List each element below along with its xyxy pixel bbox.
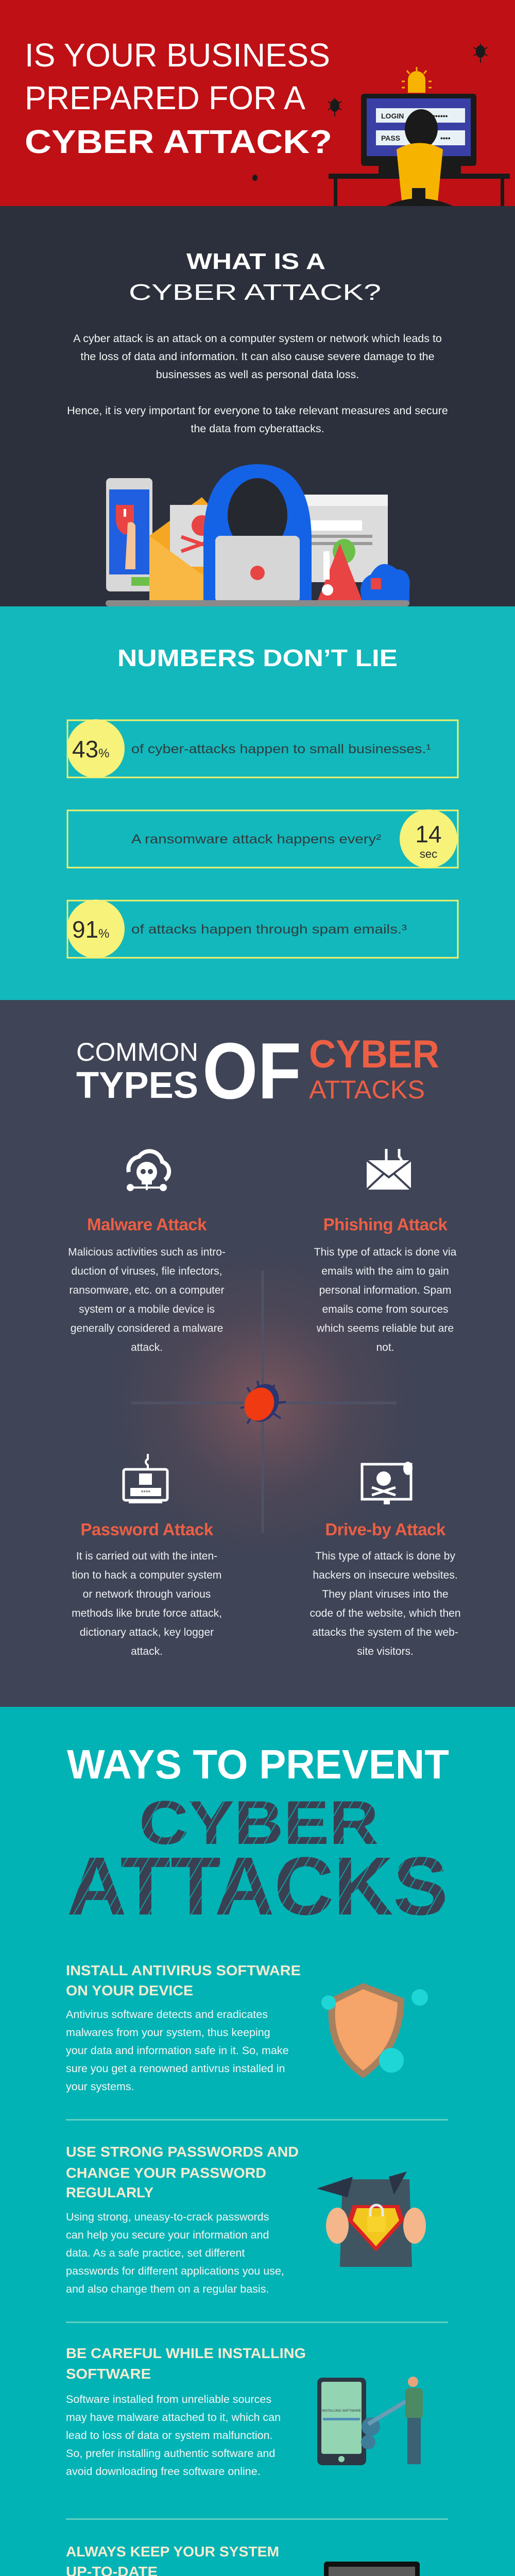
stat: 91% spam emails: of attacks happen through spam emails.³: [131, 922, 407, 937]
text: It is carried out with the inten-: [76, 1550, 217, 1562]
heading: USE STRONG PASSWORDS AND: [66, 2144, 299, 2160]
text: [66, 2393, 281, 2478]
text: Using strong, uneasy-to-crack passwords: [66, 2211, 269, 2223]
card: password attack: [72, 1520, 222, 1657]
title: CYBER ATTACK?: [25, 123, 332, 160]
text: emails with the aim to gain: [321, 1265, 449, 1277]
illustration: hacker at computer: ••••: [440, 134, 451, 142]
stat: ransomware every 14 sec: A ransomware attack happens every²: [131, 832, 381, 846]
heading: common types of cyber attacks: COMMON: [76, 1038, 198, 1066]
divider: [66, 2119, 448, 2121]
crosshair lines: [131, 1270, 397, 1533]
section: ways to prevent heading: WAYS TO PREVENT: [67, 1741, 449, 1787]
stat: 91% spam emails: 91%: [72, 916, 110, 943]
text: which seems reliable but are: [317, 1323, 454, 1334]
title: [25, 37, 332, 160]
text: passwords for different applications you use,: [66, 2265, 284, 2277]
tip 1: antivirus: [66, 1962, 428, 2093]
radial glow: [108, 1248, 417, 1557]
text: [66, 2008, 289, 2093]
text: So, prefer installing authentic software and: [66, 2447, 275, 2460]
text: data. As a safe practice, set different: [66, 2247, 245, 2259]
stat: 43% small businesses: [67, 719, 458, 778]
text block: definition: the data from cyberattacks.: [191, 422, 324, 435]
heading: [66, 2144, 299, 2200]
text block: definition: [67, 332, 448, 435]
icon: superhero shirt lock: [317, 2172, 426, 2267]
illustration: hacker at computer: PASS: [381, 134, 400, 142]
heading: common types of cyber attacks: [76, 1026, 439, 1115]
illustration: hacker with threats: [106, 464, 410, 606]
text: avoid downloading free software online.: [66, 2465, 261, 2478]
text: personal information. Spam: [319, 1284, 451, 1296]
divider: [66, 2518, 448, 2520]
illustration: hacker at computer: LOGIN: [381, 112, 404, 120]
stat: 43% small businesses: 43%: [72, 736, 110, 762]
icon: phone installing software: INSTALLING SOFTWARE: [322, 2409, 362, 2413]
card: drive-by attack: [310, 1520, 460, 1657]
text block: definition: the loss of data and information. It can also cause severe damage to the: [80, 350, 435, 363]
text: hackers on insecure websites.: [313, 1569, 458, 1581]
stat: 91% spam emails: [67, 900, 458, 958]
heading: SOFTWARE: [66, 2366, 151, 2382]
heading: INSTALL ANTIVIRUS SOFTWARE: [66, 1962, 301, 1978]
section: numbers don't lie: [0, 606, 515, 1000]
section: ways to prevent heading: ATTACKS: [67, 1840, 448, 1932]
text: [66, 2211, 284, 2295]
stat: ransomware every 14 sec: 14: [415, 821, 442, 848]
text: not.: [376, 1342, 394, 1353]
heading: common types of cyber attacks: CYBER: [309, 1032, 439, 1076]
heading: ALWAYS KEEP YOUR SYSTEM: [66, 2544, 279, 2560]
text: and also change them on a regular basis.: [66, 2283, 269, 2295]
text: Software installed from unreliable sources: [66, 2393, 271, 2405]
illustration: hacker at computer: ••••••: [433, 112, 448, 120]
title: IS YOUR BUSINESS: [25, 37, 330, 74]
card: malware attack: [68, 1215, 226, 1353]
text: code of the website, which then: [310, 1607, 460, 1619]
heading: common types of cyber attacks: ATTACKS: [309, 1075, 425, 1104]
heading: Malware Attack: [87, 1215, 207, 1234]
icon: phishing envelope hook: [367, 1149, 411, 1190]
heading: [66, 2345, 306, 2382]
text: generally considered a malware: [71, 1323, 223, 1334]
text: attack.: [131, 1646, 163, 1657]
heading: common types of cyber attacks: OF: [202, 1026, 301, 1115]
text: [314, 1246, 456, 1353]
heading: ON YOUR DEVICE: [66, 1982, 193, 1998]
icon: password attack: ****: [141, 1489, 151, 1496]
text: emails come from sources: [322, 1303, 449, 1315]
text: [68, 1246, 226, 1353]
section: header red: [0, 0, 515, 206]
text: methods like brute force attack,: [72, 1607, 222, 1619]
text: site visitors.: [357, 1646, 414, 1657]
text: duction of viruses, file infectors,: [72, 1265, 222, 1277]
tip 2: passwords: [66, 2144, 426, 2295]
heading: BE CAREFUL WHILE INSTALLING: [66, 2345, 306, 2361]
card: phishing attack: [314, 1215, 456, 1353]
heading: CHANGE YOUR PASSWORD: [66, 2165, 266, 2181]
text: dictionary attack, key logger: [80, 1626, 214, 1638]
text: This type of attack is done by: [315, 1550, 455, 1562]
icon: phone installing software: [317, 2377, 423, 2465]
icon: malware skull cloud: [126, 1149, 171, 1191]
icon: bug center: [240, 1381, 286, 1424]
heading: WHAT IS A: [186, 249, 325, 274]
icon: drive-by attack: [360, 1462, 413, 1504]
title: PREPARED FOR A: [25, 79, 305, 116]
text: your systems.: [66, 2080, 134, 2093]
stat: ransomware every 14 sec: [67, 809, 458, 869]
section: ways to prevent heading: [67, 1741, 449, 1932]
heading: REGULARLY: [66, 2184, 153, 2200]
text: can help you secure your information and: [66, 2229, 269, 2241]
text: system or a mobile device is: [79, 1303, 215, 1315]
text: [310, 1550, 460, 1657]
text: Malicious activities such as intro-: [68, 1246, 226, 1258]
section: what is a cyber attack: [0, 206, 515, 606]
heading: Drive-by Attack: [325, 1520, 445, 1539]
text: This type of attack is done via: [314, 1246, 456, 1258]
text: They plant viruses into the: [322, 1588, 449, 1600]
section: ways to prevent heading: CYBER: [139, 1788, 379, 1857]
text: sure you get a renowned antivrus installed in: [66, 2062, 285, 2075]
text: your data and information safe in it. So, make: [66, 2044, 289, 2057]
heading: [66, 2544, 279, 2576]
icon: shield with bugs: [321, 1983, 428, 2078]
divider: [66, 2321, 448, 2323]
icon: computer loading: [324, 2562, 420, 2576]
text: Antivirus software detects and eradicates: [66, 2008, 268, 2021]
text: ransomware, etc. on a computer: [69, 1284, 225, 1296]
text: attack.: [131, 1342, 163, 1353]
stat: 43% small businesses: of cyber-attacks happen to small businesses.¹: [131, 742, 431, 756]
heading: [66, 1962, 301, 1998]
heading: common types of cyber attacks: TYPES: [76, 1065, 198, 1106]
heading: Phishing Attack: [323, 1215, 447, 1234]
illustration: hacker at computer: [252, 44, 510, 206]
text block: definition: businesses as well as personal data loss.: [156, 368, 359, 381]
heading: NUMBERS DON’T LIE: [117, 645, 398, 671]
text block: definition: A cyber attack is an attack on a computer system or network which leads to: [73, 332, 442, 345]
heading: Password Attack: [80, 1520, 213, 1539]
section: common types of cyber attacks: [0, 1000, 515, 1707]
text: may have malware attached to it, which can: [66, 2411, 281, 2424]
text: or network through various: [83, 1588, 211, 1600]
text: lead to loss of data or system malfunction.: [66, 2429, 273, 2442]
tip 3: installing software: [66, 2345, 423, 2478]
text: malwares from your system, thus keeping: [66, 2026, 270, 2039]
icon: password attack: [123, 1454, 169, 1503]
tip 4: up-to-date: [66, 2544, 420, 2576]
text: [72, 1550, 222, 1657]
heading: CYBER ATTACK?: [129, 280, 381, 305]
text block: definition: Hence, it is very important for everyone to take relevant measures and secure: [67, 404, 448, 417]
text: tion to hack a computer system: [72, 1569, 221, 1581]
heading: [129, 249, 381, 305]
stat: ransomware every 14 sec: sec: [420, 848, 437, 860]
text: attacks the system of the web-: [312, 1626, 458, 1638]
